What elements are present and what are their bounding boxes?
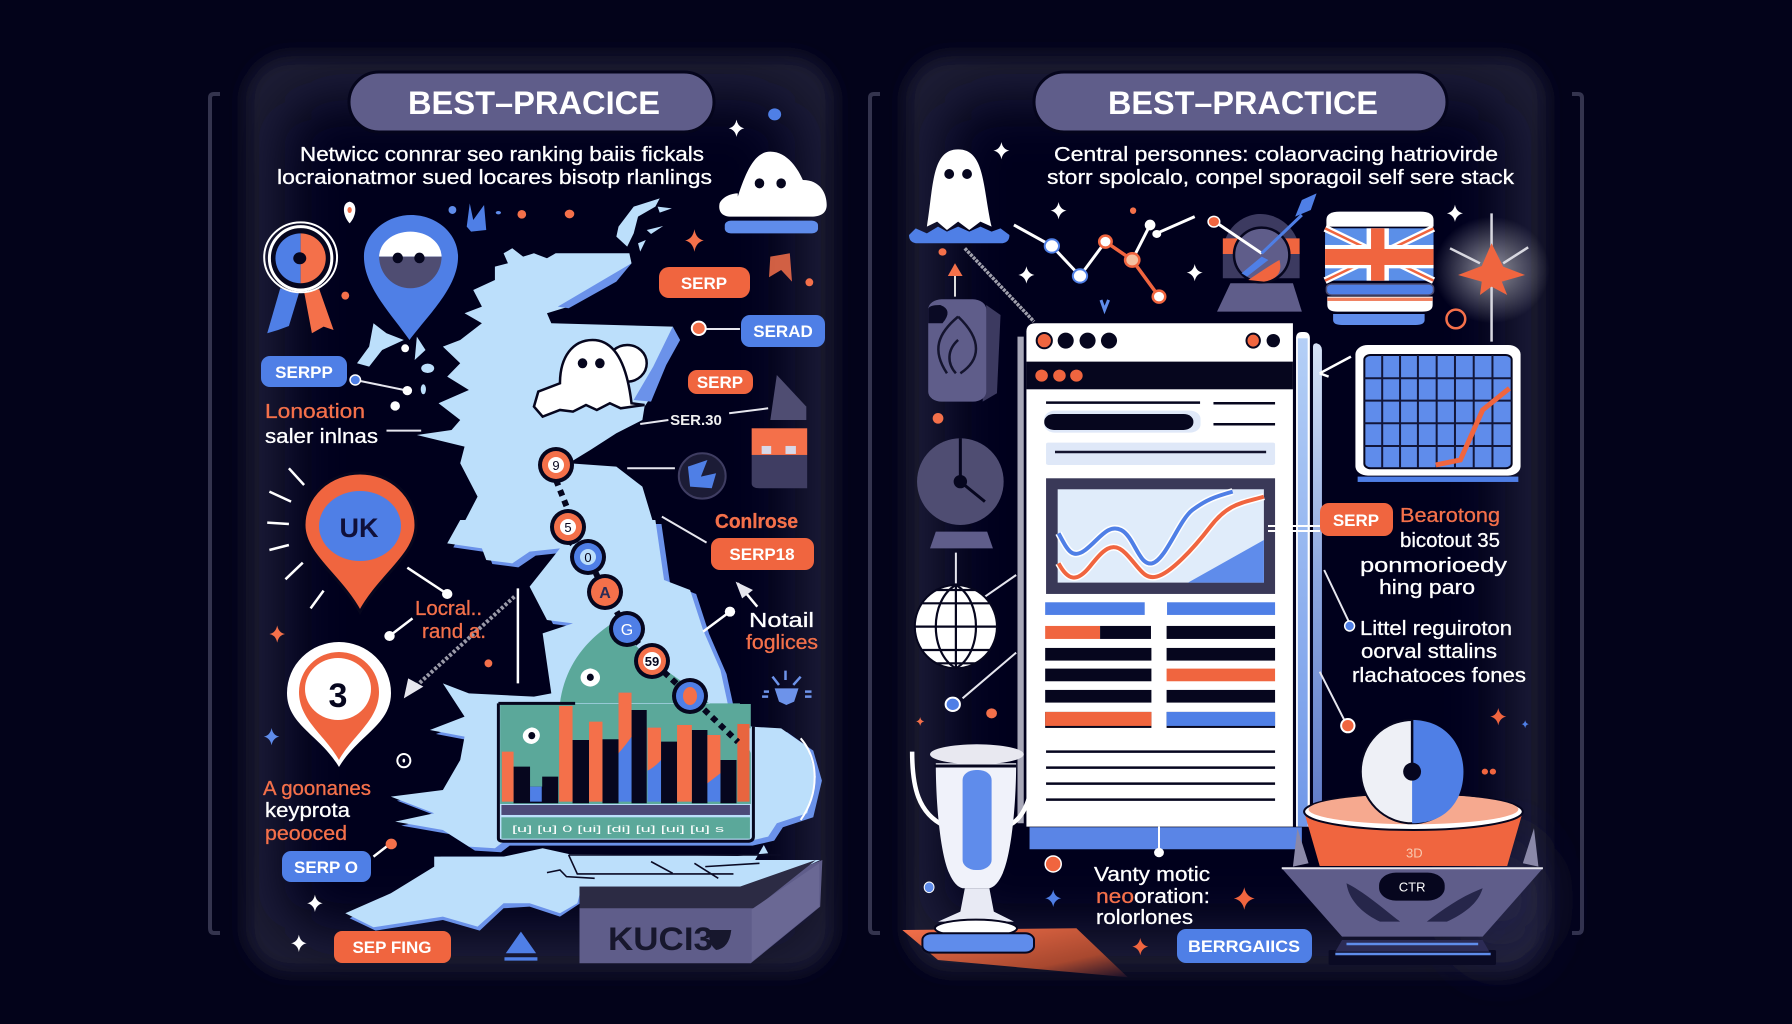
right intro text: storr spolcalo, conpel sporagoil self sere stack (1047, 167, 1515, 189)
pin 7 (672, 678, 708, 714)
right intro text: Central personnes: colaorvacing hatriovirde (1054, 144, 1498, 166)
icon: large UK location pin: UK (340, 513, 379, 543)
browser stem (1154, 827, 1164, 857)
bar chart over the map (498, 668, 753, 841)
icon: oval badge (679, 453, 726, 499)
egg dial (1361, 720, 1463, 823)
pin 5 (609, 611, 645, 647)
callout: regulation: Littel reguiroton (1360, 618, 1512, 640)
label: retail: foglices (746, 632, 818, 654)
icon: phone with flame (928, 299, 1001, 402)
browser tab dots (1037, 333, 1280, 349)
connector and orange SERP tag (1268, 503, 1393, 536)
results table (1045, 602, 1275, 728)
pin 2 (550, 509, 586, 545)
callout: benefits (1360, 505, 1507, 599)
callout: benefits: Bearotong (1400, 505, 1500, 527)
browser side strips (1017, 332, 1322, 849)
pin 5: G (621, 622, 633, 639)
tag: benchmarks: BERRGAIICS (1188, 937, 1300, 956)
callout leaders and decorations, lower right (924, 570, 1529, 955)
search bar and lines (1044, 403, 1275, 465)
callout: vanity metric: rolorlones (1096, 907, 1193, 929)
left card backdrop (246, 56, 834, 972)
side bracket: centre (870, 94, 880, 933)
3D box (579, 860, 822, 963)
label: local: Locral.. (415, 598, 482, 620)
tag: SERP orange top: SERP (681, 274, 727, 293)
icon: speed gauge (1208, 193, 1317, 312)
tag: SERP blue top: SERAD (753, 322, 813, 341)
icon: glowing star (1434, 213, 1550, 342)
left intro text: Netwicc connrar seo ranking baiis fickals (300, 144, 704, 166)
UK map: lower part with England, Wales and south coast (345, 520, 822, 931)
pin 1 (538, 447, 574, 483)
pin 6: 59 (645, 654, 659, 669)
icon: egg in orange bowl on stand (1282, 720, 1543, 965)
pin 2: 5 (564, 520, 572, 535)
bar chart axis labels: [u] [u] 0 [ui] [di] [u] [ui] [u] s (512, 824, 725, 834)
label: keywords: keyprota (265, 800, 351, 822)
stand foot (1329, 940, 1496, 965)
small decorations, bottom of left card (264, 625, 812, 961)
small decorations, top of left card (341, 108, 813, 300)
callout: vanity metric (1094, 864, 1210, 929)
tag: SERP18 (711, 538, 814, 570)
icon: blue location pin with face (364, 215, 458, 340)
icon: globe (915, 553, 1016, 726)
right card backdrop (906, 56, 1546, 972)
callout: benefits: hing paro (1379, 577, 1475, 599)
callout: vanity metric: neooration: (1096, 886, 1210, 908)
label: local (415, 598, 486, 643)
panel: left card (246, 56, 834, 972)
browser window (1026, 323, 1293, 827)
browser results page (1017, 323, 1322, 857)
label: location (265, 401, 378, 448)
tag: SERP O: SERP O (294, 858, 358, 877)
tag: SERP orange top (659, 267, 750, 298)
tag: SERP blue top (741, 315, 825, 347)
label: keywords (263, 778, 371, 845)
icon: numbered pin 3: 3 (329, 677, 347, 715)
label: location: Lonoation (265, 401, 365, 423)
pin 3: 0 (584, 550, 592, 565)
icon: numbered pin 3 (287, 642, 391, 767)
UK map: upper part with Scotland (357, 198, 680, 530)
pin 4: A (599, 585, 611, 602)
icon: UK flag stack (1325, 212, 1434, 325)
icon: mini grid chart (1320, 345, 1521, 482)
icon: rosette award (264, 222, 337, 333)
browser toolbar (1026, 362, 1293, 389)
side bracket: far right (1572, 94, 1582, 933)
pin chain links (556, 480, 738, 742)
pin 4 (587, 574, 623, 610)
label: retail (746, 610, 818, 654)
tag: benchmarks (1177, 929, 1312, 963)
connector and orange SERP tag: SERP (1333, 511, 1379, 530)
label: location: saler inlnas (265, 426, 378, 448)
tag: SERP blue left: SERPP (275, 363, 333, 382)
icon: trophy (902, 744, 1128, 977)
chart in browser (1046, 478, 1275, 594)
icon: dark location building (752, 375, 807, 488)
tag: SEP FING (334, 931, 451, 963)
bowl leaves (1346, 883, 1483, 922)
tag: SERP blue left (261, 356, 347, 387)
ghost on cloud, top right (719, 152, 827, 233)
text lines (1046, 752, 1275, 800)
callout: benefits: bicotout 35 (1400, 530, 1500, 552)
route of numbered map pins (538, 447, 738, 742)
CTR pill: CTR (1399, 880, 1425, 895)
line chart (1014, 217, 1195, 303)
left intro text: locraionatmor sued locares bisotp rlanlings (277, 167, 712, 189)
tag: SERP orange small (688, 370, 753, 394)
callout: benefits: ponmorioedy (1360, 555, 1507, 577)
icon: large UK location pin (304, 473, 416, 612)
label: keywords: peooced (265, 823, 347, 845)
label: keywords: A goonanes (263, 778, 371, 800)
rays and callouts beside the UK pin (267, 468, 757, 767)
icon: ghost on wave (909, 149, 1009, 243)
ghost on cloud over Scotland (534, 340, 647, 417)
tag: SEP FING: SEP FING (352, 938, 432, 957)
tag: SERP O (282, 851, 371, 882)
icon: clock (917, 438, 1004, 548)
left heading pill (349, 72, 714, 132)
pin 3 (570, 539, 606, 575)
box label: KUCI3 (608, 921, 713, 957)
label: centre: Conlrose (715, 511, 798, 533)
island west of Scotland (357, 323, 426, 367)
callout: regulation (1352, 618, 1526, 687)
CTR pill (1379, 873, 1445, 901)
tag: SERP18: SERP18 (729, 545, 795, 564)
splash of islands north of Scotland (616, 198, 672, 252)
bowl label: 3D (1406, 845, 1423, 860)
connector lines and dots around the map (350, 322, 768, 543)
label: retail: Notail (749, 610, 814, 632)
callout: regulation: oorval sttalins (1361, 641, 1497, 663)
pin 1: 9 (552, 458, 560, 473)
panel: right card (902, 56, 1550, 977)
decorations near ghost (933, 142, 1463, 424)
callout: regulation: rlachatoces fones (1352, 665, 1526, 687)
label: local: rand a. (422, 621, 486, 643)
side bracket: far left (210, 94, 220, 933)
left heading pill: BEST–PRACICE (408, 85, 660, 121)
callout: vanity metric: Vanty motic (1094, 864, 1210, 886)
tag: SER.30: SER.30 (670, 412, 722, 429)
right heading pill: BEST–PRACTICE (1108, 85, 1378, 121)
pin 6 (634, 643, 670, 679)
right heading pill (1034, 72, 1447, 132)
tag: SERP orange small: SERP (697, 373, 743, 392)
